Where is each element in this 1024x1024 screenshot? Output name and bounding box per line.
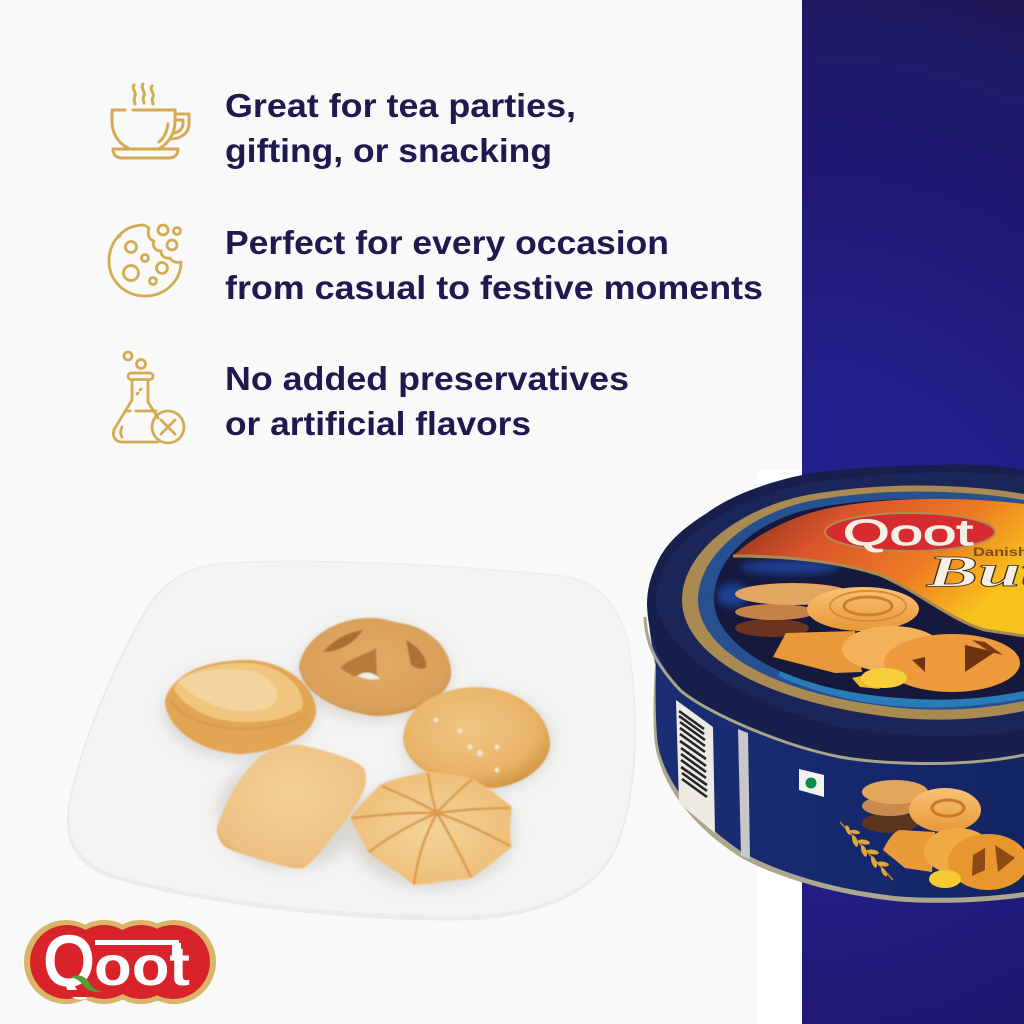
dark centre	[714, 499, 1024, 700]
orange sunset panel	[733, 499, 1024, 636]
tin lid	[647, 465, 1024, 764]
logo wordmark: Q	[44, 922, 94, 1000]
blue ring highlight	[780, 672, 1024, 703]
logo wordmark	[44, 922, 190, 1000]
wheat ear	[840, 822, 893, 880]
printed cookies on side	[862, 780, 1024, 890]
feature list	[109, 84, 763, 443]
cookie: swirl	[165, 660, 316, 754]
plate	[67, 561, 636, 921]
heading: every occasion: from casual to festive moments	[225, 269, 763, 306]
lid logo	[825, 512, 995, 553]
tin lower lip	[645, 617, 1024, 764]
feature 2	[109, 224, 763, 306]
heading: tea parties: gifting, or snacking	[225, 132, 552, 169]
biscuit tin	[645, 465, 1024, 903]
printed butter curl	[852, 668, 907, 689]
printed square cookie	[773, 631, 862, 673]
heading: no preservatives: No added preservatives	[225, 360, 629, 397]
veg mark	[799, 769, 824, 797]
photo backdrop patch	[757, 470, 803, 1024]
cookie: square	[217, 745, 366, 868]
cookie: round	[403, 687, 550, 788]
printed cookie stack	[735, 583, 851, 637]
gold ring	[682, 486, 1024, 720]
printed pretzel cookies	[842, 626, 1020, 692]
heading: tea parties: Great for tea parties,	[225, 87, 576, 124]
navy side panel	[802, 0, 1024, 1024]
Qoot logo	[24, 920, 216, 1004]
cookie: pretzel	[299, 618, 451, 716]
printed ring cookie	[807, 587, 919, 631]
blue ring	[698, 492, 1024, 710]
swoosh gold edge	[733, 556, 1024, 636]
lid artwork	[682, 486, 1024, 720]
icon: steaming tea cup	[112, 84, 189, 158]
plate with cookies	[67, 561, 636, 921]
blue glows	[717, 560, 840, 607]
heading: every occasion	[225, 224, 763, 306]
icon: cookie with bite	[109, 225, 181, 296]
lid text: Danish	[973, 545, 1024, 559]
icon: flask with cross	[113, 352, 184, 443]
cookie shadows	[164, 624, 552, 888]
logo leaf	[71, 975, 104, 992]
cookie: star	[350, 772, 512, 885]
heading: no preservatives	[225, 360, 629, 442]
logo red badge	[30, 925, 210, 999]
lid logo: Qoot	[843, 512, 973, 553]
feature 3	[113, 352, 629, 443]
feature 1	[112, 84, 576, 169]
heading: tea parties	[225, 87, 576, 169]
heading: no preservatives: or artificial flavors	[225, 405, 531, 442]
barcode label	[676, 700, 715, 833]
heading: every occasion: Perfect for every occasion	[225, 224, 669, 261]
tin body	[648, 610, 1024, 903]
seam strip	[738, 729, 750, 859]
logo gold border	[24, 920, 216, 1004]
logo wordmark: oot	[94, 934, 190, 997]
